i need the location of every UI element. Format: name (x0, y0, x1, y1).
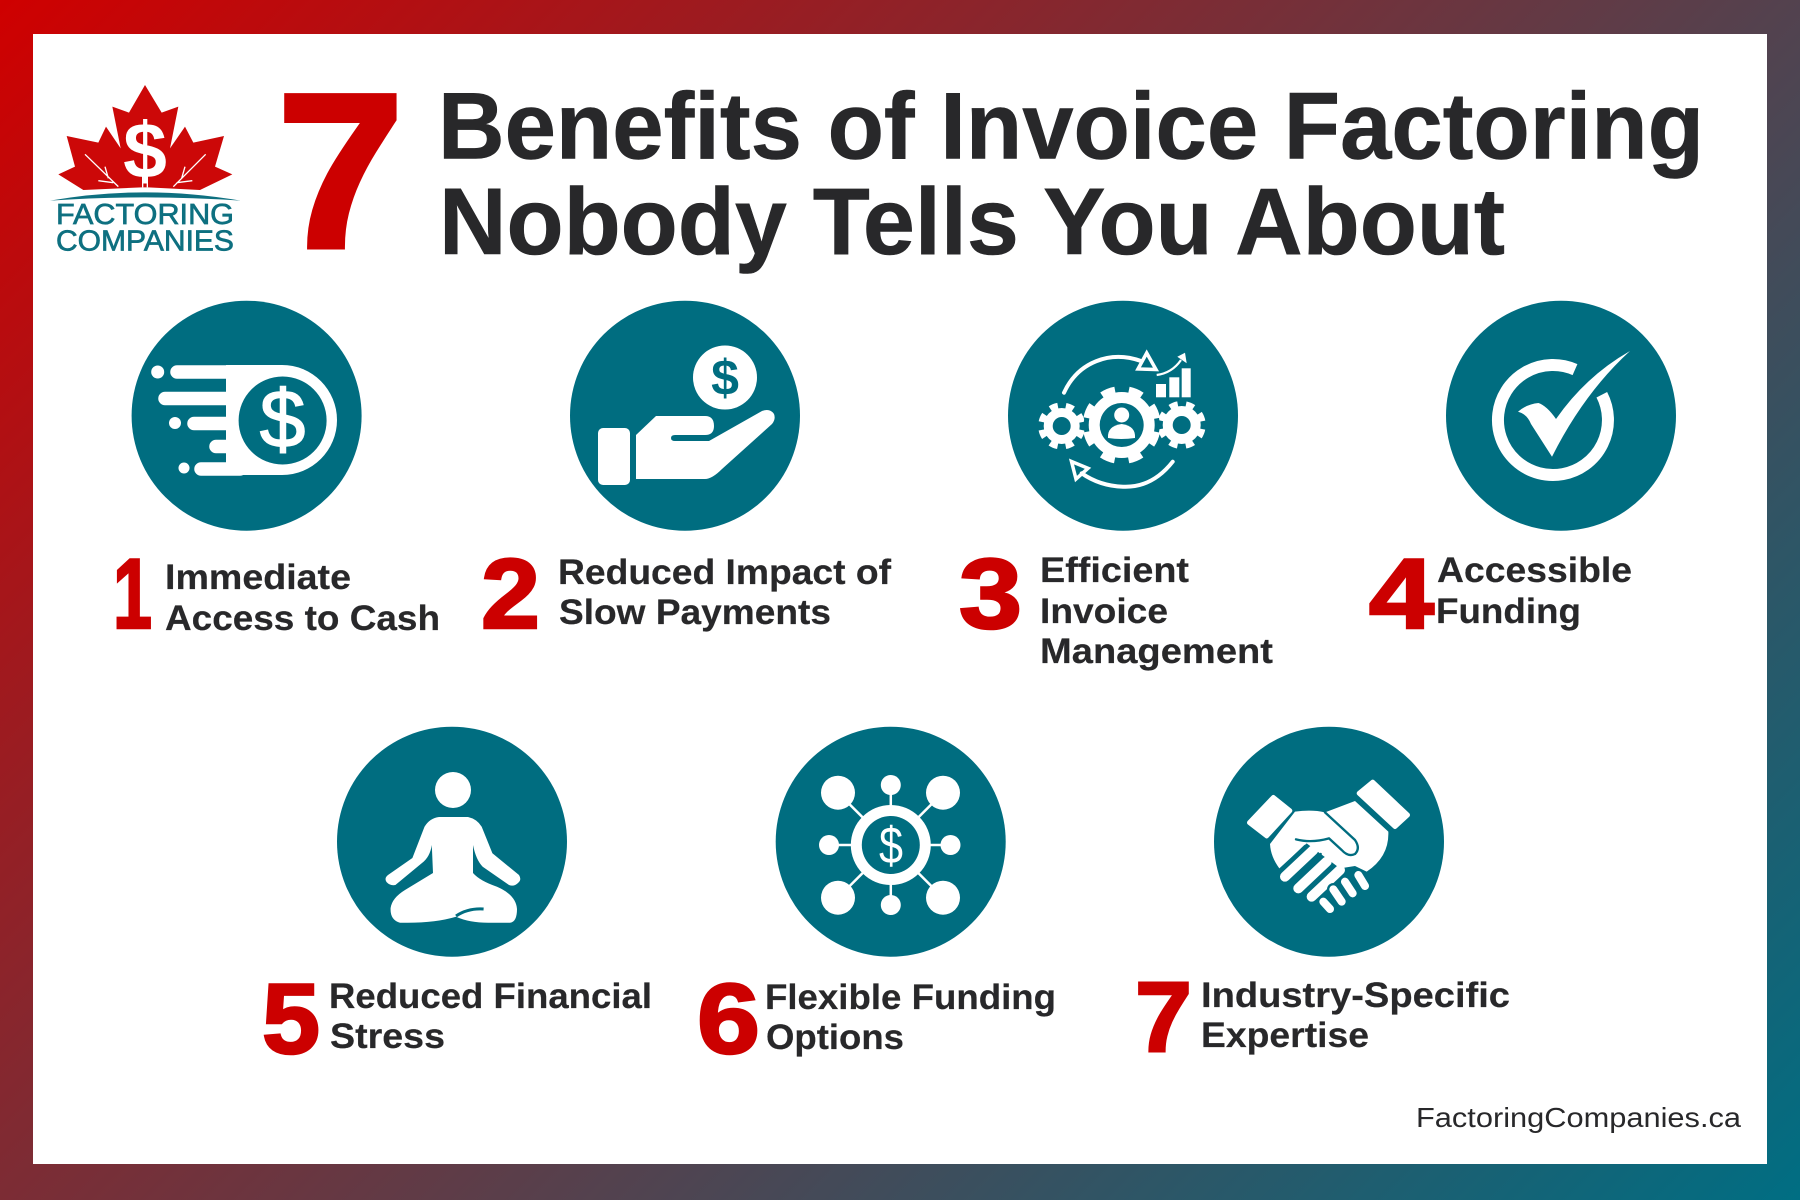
label 5 (329, 977, 652, 1056)
logo leaf (58, 85, 232, 190)
item 5: reduced financial stress (262, 727, 652, 1074)
logo: Factoring Companies maple leaf (50, 85, 241, 258)
item 6: flexible funding options (697, 727, 1056, 1074)
label 4: Accessible (1437, 551, 1632, 590)
label 1: Immediate (165, 558, 351, 597)
title line 1: Benefits of Invoice Factoring (438, 73, 1704, 179)
label 6 (765, 978, 1056, 1057)
label 2: Reduced Impact of (558, 553, 891, 592)
label 4 (1436, 551, 1632, 631)
icon: fast coin (132, 301, 362, 531)
icon: hand with coin (570, 301, 800, 531)
number 7: 7 (1135, 961, 1192, 1072)
icon: gears with cycle arrows (1008, 301, 1238, 531)
logo dollar sign: $ (123, 106, 167, 194)
icon: check mark in ring (1446, 301, 1676, 531)
number 6: 6 (697, 963, 760, 1074)
number 3: 3 (959, 538, 1022, 649)
big number 7: 7 (277, 48, 404, 294)
label 3: Invoice (1040, 592, 1168, 631)
label 2: Slow Payments (559, 593, 831, 632)
label 7: Expertise (1201, 1016, 1369, 1055)
label 3: Efficient (1040, 551, 1189, 590)
number 1: 1 (113, 538, 152, 649)
footer website: FactoringCompanies.ca (1416, 1102, 1741, 1133)
label 6: Flexible Funding (765, 978, 1056, 1017)
label 1: Access to Cash (165, 599, 440, 638)
icon: funding network: $ (879, 817, 903, 875)
item 1: immediate access to cash (113, 301, 440, 649)
icon: handshake (1214, 727, 1444, 957)
icon: hand with coin: $ (711, 350, 739, 406)
label 3: Management (1040, 632, 1273, 671)
item 7: industry-specific expertise (1135, 727, 1510, 1072)
label 6: Options (766, 1018, 904, 1057)
icon: fast coin: $ (260, 374, 305, 465)
logo word: Companies: COMPANIES (56, 226, 234, 258)
label 7: Industry-Specific (1201, 976, 1510, 1015)
label 1 (165, 558, 440, 638)
label 7 (1201, 976, 1510, 1055)
number 2: 2 (481, 538, 540, 649)
number 5: 5 (262, 963, 320, 1074)
title (438, 73, 1704, 275)
title line 2: Nobody Tells You About (439, 169, 1505, 275)
label 2 (558, 553, 891, 632)
icon: meditating figure (337, 727, 567, 957)
icon: funding network (776, 727, 1006, 957)
item 3: efficient invoice management (959, 301, 1273, 671)
label 3 (1040, 551, 1273, 671)
logo veins (85, 154, 206, 187)
label 4: Funding (1436, 592, 1581, 631)
logo arc (50, 192, 241, 201)
item 2: reduced impact of slow payments (481, 301, 891, 649)
number 4: 4 (1369, 538, 1434, 649)
logo word: Factoring: FACTORING (56, 199, 234, 231)
label 5: Reduced Financial (329, 977, 652, 1016)
label 5: Stress (330, 1017, 445, 1056)
item 4: accessible funding (1369, 301, 1676, 649)
